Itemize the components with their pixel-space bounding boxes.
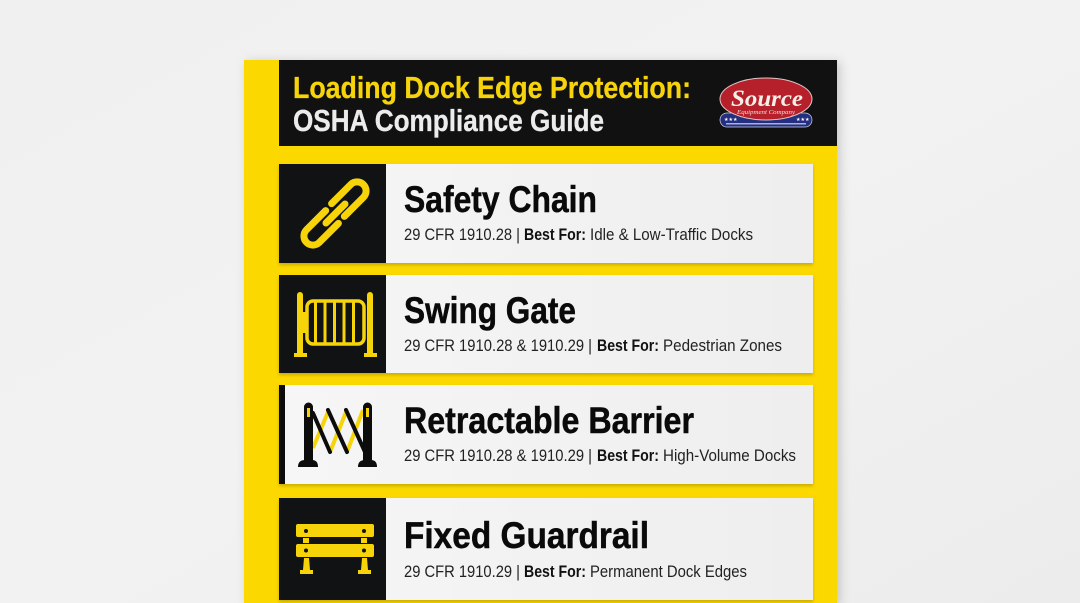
subtext: Best For: [524, 226, 586, 244]
heading: Fixed Guardrail [404, 515, 649, 556]
icon: chain link [300, 178, 370, 249]
subtext [404, 226, 753, 244]
subtext [404, 447, 796, 465]
subtext: Best For: [524, 563, 586, 581]
heading: Swing Gate [404, 290, 576, 331]
heading: Safety Chain [404, 179, 597, 220]
row: Safety Chain [279, 164, 813, 263]
subtext [404, 563, 747, 581]
title [293, 70, 691, 138]
subtext: 29 CFR 1910.29 | [404, 563, 520, 581]
poster panel [244, 60, 837, 603]
icon: fixed guardrail [296, 524, 374, 574]
subtext: Pedestrian Zones [663, 337, 782, 355]
subtext: 29 CFR 1910.28 & 1910.29 | [404, 447, 592, 465]
title: Loading Dock Edge Protection: [293, 70, 691, 105]
subtext: Idle & Low-Traffic Docks [590, 226, 753, 244]
subtext: 29 CFR 1910.28 & 1910.29 | [404, 337, 592, 355]
subtext [404, 337, 782, 355]
heading: Retractable Barrier [404, 400, 694, 441]
header bar [279, 60, 837, 146]
icon: swing gate [294, 292, 377, 357]
subtext: High-Volume Docks [663, 447, 796, 465]
row: Fixed Guardrail [279, 498, 813, 600]
row: Swing Gate [279, 275, 813, 373]
row: Retractable Barrier [279, 385, 813, 484]
logo: Source Equipment Company: Equipment Company [736, 109, 795, 116]
title: OSHA Compliance Guide [293, 103, 604, 138]
logo: Source Equipment Company: ★★★ [724, 117, 738, 123]
logo: Source Equipment Company: Source [731, 86, 803, 111]
subtext: Best For: [597, 447, 659, 465]
subtext: 29 CFR 1910.28 | [404, 226, 520, 244]
subtext: Best For: [597, 337, 659, 355]
logo: Source Equipment Company: ★★★ [796, 117, 810, 123]
logo: Source Equipment Company [720, 78, 812, 127]
icon: retractable barrier [298, 402, 377, 467]
subtext: Permanent Dock Edges [590, 563, 747, 581]
